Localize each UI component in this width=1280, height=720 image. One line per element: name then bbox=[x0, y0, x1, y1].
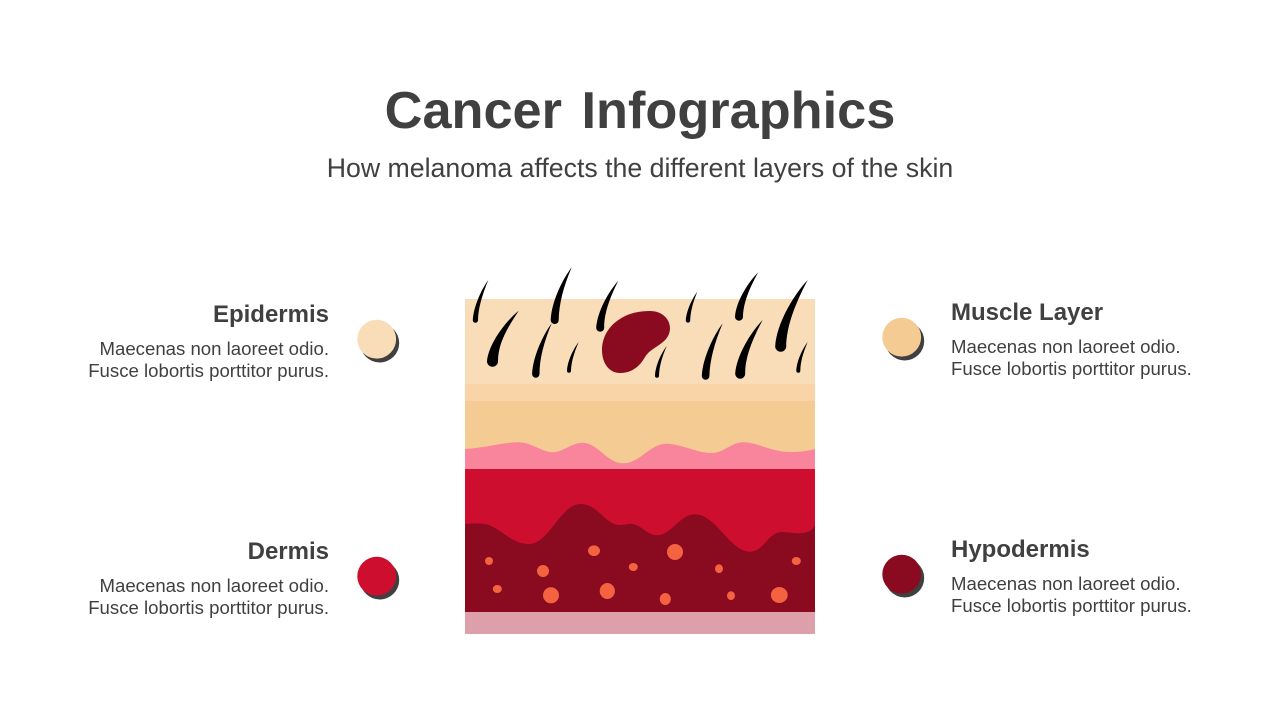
text block: Dermis: Dermis bbox=[248, 538, 329, 565]
layer: pink wave bbox=[465, 442, 815, 469]
layer: epidermis lower band bbox=[465, 384, 815, 401]
text block: Epidermis bbox=[88, 301, 329, 381]
layer: epidermis bbox=[465, 299, 815, 384]
layer: dermis bbox=[465, 469, 815, 569]
text block: Dermis bbox=[88, 538, 329, 618]
text block: Epidermis: Maecenas non laoreet odio. bbox=[100, 338, 329, 359]
text block: Muscle Layer: Fusce lobortis porttitor purus. bbox=[951, 358, 1192, 379]
layer: hypodermis bbox=[465, 504, 815, 612]
text block: Muscle Layer bbox=[951, 299, 1192, 379]
icon: Dermis colour dot bbox=[357, 557, 399, 600]
text block: Hypodermis: Fusce lobortis porttitor purus. bbox=[951, 595, 1192, 616]
melanoma lesion bbox=[602, 311, 670, 373]
text block: Epidermis: Fusce lobortis porttitor purus. bbox=[88, 360, 329, 381]
text block: Hypodermis bbox=[951, 536, 1192, 616]
cells bbox=[485, 544, 801, 605]
title: Cancer Infographics bbox=[385, 82, 895, 140]
text block: Dermis: Maecenas non laoreet odio. bbox=[100, 575, 329, 596]
layer: bottom band bbox=[465, 612, 815, 634]
text block: Hypodermis: Maecenas non laoreet odio. bbox=[951, 573, 1180, 594]
icon: Hypodermis colour dot bbox=[882, 555, 924, 598]
text block: Dermis: Fusce lobortis porttitor purus. bbox=[88, 597, 329, 618]
text block: Muscle Layer: Maecenas non laoreet odio. bbox=[951, 336, 1180, 357]
icon: Epidermis colour dot bbox=[357, 320, 399, 362]
text block: Hypodermis: Hypodermis bbox=[951, 536, 1090, 563]
skin cross-section diagram bbox=[465, 267, 815, 634]
subtitle: How melanoma affects the different layers of the skin bbox=[327, 153, 953, 183]
layer: muscle bbox=[465, 401, 815, 469]
hairs bbox=[473, 267, 808, 380]
text block: Epidermis: Epidermis bbox=[213, 301, 329, 328]
text block: Muscle Layer: Muscle Layer bbox=[951, 299, 1103, 326]
icon: Muscle Layer colour dot bbox=[882, 318, 924, 360]
